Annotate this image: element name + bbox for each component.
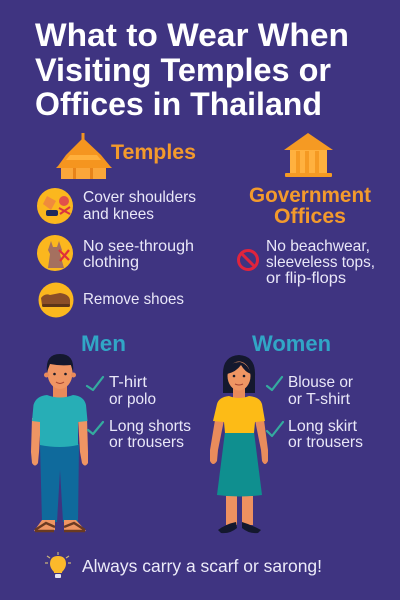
heading: men: Men — [81, 331, 126, 356]
icon: light bulb — [45, 552, 71, 578]
panel: women — [210, 331, 363, 533]
check: trousers — [88, 422, 103, 434]
title: Offices in Thailand — [35, 86, 322, 122]
heading: women: Women — [252, 331, 331, 356]
text: office rules: or flip-flops — [266, 270, 346, 287]
text: women bottom: Long skirt — [288, 418, 358, 435]
icon: cover shoulders — [37, 188, 73, 224]
text: men shirt: T-hirt — [109, 374, 148, 391]
text: office rules: sleeveless tops, — [266, 254, 375, 271]
panel: temples — [37, 133, 196, 318]
text: remove shoes: Remove shoes — [83, 291, 184, 308]
text: office rules: No beachwear, — [266, 238, 370, 255]
text: men trousers — [109, 418, 191, 451]
text: tip: Always carry a scarf or sarong! — [82, 556, 322, 576]
check: shirt — [87, 377, 103, 390]
text: men shirt — [109, 374, 156, 408]
text: women top: Blouse or — [288, 374, 354, 391]
panel: government offices — [238, 133, 375, 287]
text: no see-through: clothing — [83, 254, 139, 271]
callout: tip — [45, 552, 322, 578]
text: men trousers: Long shorts — [109, 418, 191, 435]
icon: no see-through — [37, 235, 73, 271]
text: men trousers: or trousers — [109, 434, 184, 451]
icon: temple — [56, 133, 112, 179]
title: What to Wear When — [35, 17, 349, 53]
text: women top: or T-shirt — [288, 391, 351, 408]
text: men shirt: or polo — [109, 391, 156, 408]
text: women bottom: or trousers — [288, 434, 363, 451]
heading: government offices: Government — [249, 184, 371, 207]
text: women bottom — [288, 418, 363, 451]
heading: government offices: Offices — [274, 205, 346, 228]
heading: government offices — [249, 184, 371, 228]
check: skirt — [267, 422, 283, 436]
heading: temples: Temples — [111, 141, 196, 164]
check: blouse — [267, 377, 282, 390]
text: office rules — [266, 238, 375, 287]
icon: government building — [284, 133, 333, 177]
text: no see-through — [83, 238, 194, 271]
figure: man — [31, 354, 88, 532]
figure: woman — [210, 355, 268, 533]
text: women top — [288, 374, 354, 408]
title: Visiting Temples or — [35, 52, 331, 88]
text: cover shoulders — [83, 189, 196, 223]
icon: prohibited — [238, 250, 258, 270]
text: no see-through: No see-through — [83, 238, 194, 255]
panel: men — [31, 331, 191, 532]
icon: remove shoes — [38, 282, 74, 318]
title — [35, 17, 349, 122]
text: cover shoulders: Cover shoulders — [83, 189, 196, 206]
text: cover shoulders: and knees — [83, 206, 154, 223]
